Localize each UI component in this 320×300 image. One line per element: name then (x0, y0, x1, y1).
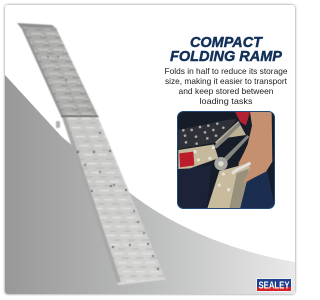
perforated dark deck (178, 119, 237, 149)
struts (223, 135, 249, 162)
description text: Folds in half to reduce its storage (164, 66, 288, 76)
ramp hinge bar (61, 116, 99, 118)
title: COMPACT (190, 35, 263, 51)
title: FOLDING RAMP (170, 49, 282, 65)
description text: and keep stored between (178, 86, 274, 96)
logo: SEALEY: SEALEY (258, 280, 290, 292)
description text: loading tasks (200, 96, 252, 106)
ramp perforation holes (47, 56, 159, 270)
image: folding ramp (17, 23, 166, 285)
trousers (178, 165, 212, 208)
warning label (179, 152, 194, 167)
ramp lower section (62, 117, 166, 285)
red sleeve (235, 112, 250, 126)
hinge (214, 157, 228, 170)
side plate (178, 144, 218, 169)
fingers (238, 153, 251, 184)
arm (238, 112, 272, 182)
upper plate (215, 121, 246, 147)
photo: hand unfolding ramp (177, 111, 275, 209)
ramp top lip (17, 23, 57, 29)
lower plate (207, 163, 250, 208)
description text: size, making it easier to transport (165, 76, 288, 86)
logo: SEALEY (256, 278, 292, 292)
grey swoosh background (5, 75, 295, 294)
ramp upper section (21, 27, 98, 116)
ramp hinge knob (56, 121, 60, 128)
